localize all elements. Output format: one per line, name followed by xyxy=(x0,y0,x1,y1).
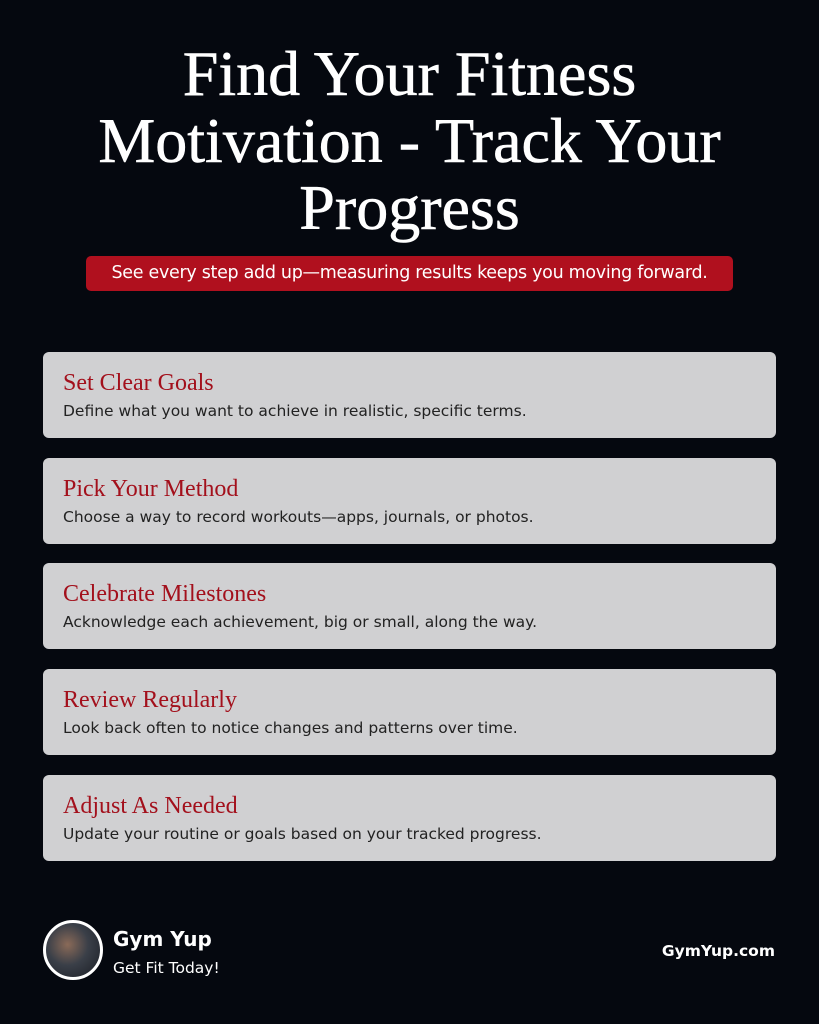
icon: avatar xyxy=(43,920,103,980)
card: adjust as needed: Adjust As Needed xyxy=(63,793,238,819)
card: celebrate milestones xyxy=(43,563,776,649)
title: Motivation - Track Your xyxy=(98,105,721,176)
card: pick your method: Choose a way to record workouts—apps, journals, or photos. xyxy=(63,508,534,526)
card: review regularly xyxy=(43,669,776,755)
title: Find Your Fitness xyxy=(183,38,636,109)
title: Progress xyxy=(299,172,520,243)
subtitle banner xyxy=(86,256,733,291)
card: set clear goals: Set Clear Goals xyxy=(63,370,214,396)
card: set clear goals: Define what you want to achieve in realistic, specific terms. xyxy=(63,402,527,420)
subtitle banner: See every step add up—measuring results keeps you moving forward. xyxy=(111,263,708,283)
card: celebrate milestones: Acknowledge each achievement, big or small, along the way. xyxy=(63,613,537,631)
title xyxy=(98,38,721,243)
brand name: Gym Yup xyxy=(113,927,212,951)
footer brand xyxy=(43,920,220,980)
card: adjust as needed xyxy=(43,775,776,861)
card: celebrate milestones: Celebrate Milestones xyxy=(63,581,266,607)
card: set clear goals xyxy=(43,352,776,438)
tagline: Get Fit Today! xyxy=(113,959,220,977)
card: review regularly: Review Regularly xyxy=(63,687,237,713)
card: review regularly: Look back often to notice changes and patterns over time. xyxy=(63,719,518,737)
card: pick your method xyxy=(43,458,776,544)
card: adjust as needed: Update your routine or goals based on your tracked progress. xyxy=(63,825,542,843)
card: pick your method: Pick Your Method xyxy=(63,476,238,502)
website: GymYup.com xyxy=(662,942,775,960)
